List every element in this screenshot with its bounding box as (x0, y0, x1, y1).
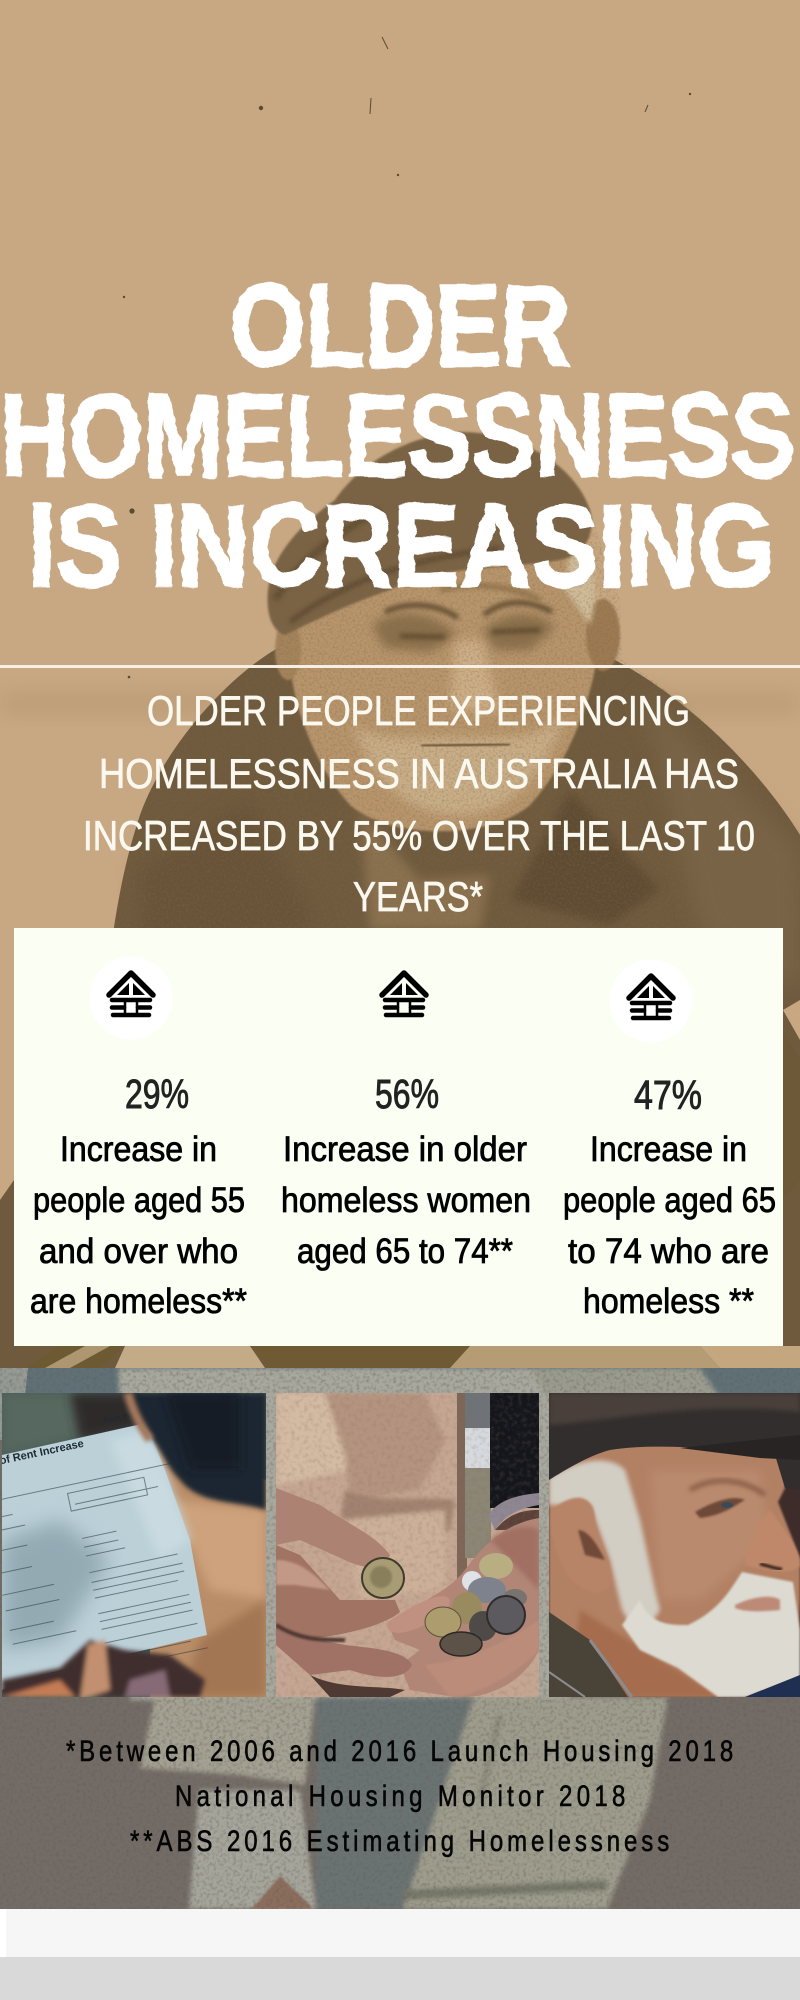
photo: rent increase notice (0, 1393, 266, 1700)
title (0, 260, 795, 611)
photo: hands holding coins (276, 1393, 539, 1697)
paper (2, 1423, 207, 1690)
stat: 47%: to 74 who are (568, 1232, 769, 1271)
stat: 47%: Increase in (590, 1130, 747, 1169)
photo: rent increase notice: of Rent Increase (0, 1438, 85, 1467)
collar (360, 810, 490, 930)
ear (556, 1496, 610, 1568)
nose (745, 1510, 800, 1571)
subheading (83, 687, 755, 920)
hair (130, 1393, 266, 1510)
man grain (275, 434, 746, 918)
stat: 47% (563, 1072, 776, 1321)
stat: 29%: and over who (39, 1232, 238, 1271)
beard (352, 715, 565, 815)
footnotes: *Between 2006 and 2016 Launch Housing 2018 (66, 1733, 733, 1768)
stat: 47%: 47% (634, 1072, 702, 1118)
cap (549, 1410, 800, 1490)
stat: 29%: are homeless** (30, 1282, 247, 1321)
neck and face (288, 540, 602, 831)
face (549, 1440, 800, 1697)
left hand (276, 1488, 390, 1567)
footnotes: **ABS 2016 Estimating Homelessness (130, 1823, 669, 1858)
flat cap (268, 432, 592, 635)
collar (549, 1612, 628, 1697)
shoe (252, 1876, 311, 1909)
beard (622, 1572, 800, 1697)
subheading: OLDER PEOPLE EXPERIENCING (147, 687, 690, 734)
stat: 29% (30, 1071, 247, 1321)
icon: house 1 (90, 956, 172, 1040)
icon: house 3 (610, 960, 692, 1042)
stat: 29%: 29% (125, 1071, 189, 1117)
right trouser leg (403, 1697, 668, 1909)
background: sepia photo of older man (0, 0, 800, 1368)
stat: 56%: 56% (375, 1071, 439, 1117)
stat: 29%: Increase in (60, 1130, 217, 1169)
panel: statistics (14, 928, 783, 1346)
left trouser leg (140, 1697, 315, 1785)
gap between legs (316, 1697, 474, 1909)
trousers below the panel (25, 1346, 125, 1368)
right hand (388, 1518, 539, 1697)
stat: 56%: aged 65 to 74** (297, 1232, 513, 1271)
photo: bearded man in cap (549, 1393, 800, 1697)
jacket (0, 648, 800, 1368)
title: OLDER (230, 260, 571, 391)
blurred hand (2, 1640, 205, 1700)
coins (362, 1558, 404, 1598)
icon: house 2 (382, 973, 426, 1015)
skin (150, 1430, 266, 1697)
eyes and brows (372, 613, 458, 652)
footer strips (0, 1909, 800, 2000)
eye (695, 1498, 745, 1518)
background: grey lower band with trousers and concrete (0, 1368, 800, 1909)
photo: rent increase notice: From the land (103, 1408, 150, 1425)
specks (123, 37, 691, 678)
footnotes (66, 1733, 733, 1858)
stat: 56%: homeless women (281, 1181, 531, 1220)
subheading: YEARS* (353, 873, 483, 920)
footnotes: National Housing Monitor 2018 (175, 1778, 625, 1813)
knit grain (276, 1393, 539, 1697)
concrete grain (0, 1368, 800, 1909)
stat: 56% (281, 1071, 531, 1271)
white hair (549, 1461, 660, 1640)
dark coat (490, 1393, 539, 1508)
stat: 29%: people aged 55 (33, 1181, 245, 1220)
stat: 56%: Increase in older (283, 1130, 527, 1169)
walking stick (457, 1393, 467, 1583)
stat: 47%: homeless ** (583, 1282, 754, 1321)
stat: 47%: people aged 65 (563, 1181, 776, 1220)
